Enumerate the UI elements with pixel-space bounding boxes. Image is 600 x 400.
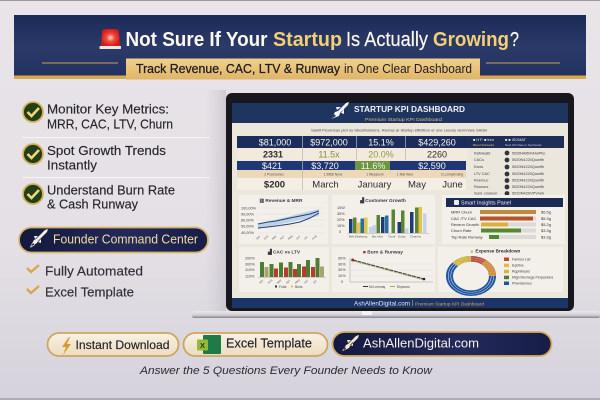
- chart: burn and runway: 90%: [338, 256, 346, 260]
- chart: CAC vs LTV: Apr: [285, 279, 291, 285]
- panel: smart insights: $3.3g: [541, 234, 551, 239]
- side list panel: 5020N4220Quwtfh: [512, 158, 544, 162]
- chart: burn and runway: Mi Lrmmay: [369, 285, 386, 289]
- side list panel: 5020N4220Quwtfh: [512, 172, 544, 176]
- benefit: burn rate: & Cash Runway: [47, 196, 138, 212]
- KPI table: January: [358, 180, 392, 190]
- chart: CAC vs LTV: May: [294, 278, 301, 285]
- chart: revenue and MRR: [239, 195, 328, 244]
- chart: customer growth: Tiontr: [388, 234, 396, 238]
- chart: expense breakdown: [438, 247, 563, 295]
- dashboard header: STARTUP KPI DASHBOARD: [354, 105, 465, 114]
- chart: customer growth: Chanlns: [410, 234, 422, 238]
- laptop with dashboard: [226, 93, 574, 311]
- side list panel: 5020N4220Quwtfh: [512, 165, 544, 169]
- side list panel: [467, 136, 564, 196]
- chart: CAC vs LTV: Jul: [312, 279, 318, 285]
- KPI table: 11.5x: [318, 150, 340, 160]
- title: [126, 29, 519, 51]
- KPI table: $200: [264, 180, 285, 190]
- chart: CAC vs LTV: Jan: [258, 278, 264, 285]
- dashboard footer: Premium Startup KPI Dashboard: [415, 302, 485, 306]
- KPI table: 1 Wepsoom: [366, 172, 384, 176]
- chart: CAC vs LTV: Jun: [303, 278, 309, 285]
- dashboard header: Premium Startup KPI Dashboard: [365, 117, 443, 122]
- KPI table: June: [442, 180, 463, 190]
- chart: customer growth: 35%: [337, 212, 345, 216]
- chart: customer growth: ▟ Customer Growth: [359, 197, 406, 204]
- laptop base: [192, 311, 600, 318]
- KPI table: 1 Mat Nare: [397, 172, 413, 176]
- button: instant download: [48, 333, 178, 356]
- title: ?: [510, 29, 519, 51]
- chart: expense breakdown: ▲ Expense Breakdown: [470, 248, 521, 254]
- title: Growing: [433, 29, 509, 51]
- KPI table: 1 5568 Nyns: [324, 172, 343, 176]
- panel: smart insights: MRR Churn: [451, 210, 472, 214]
- chart: revenue and MRR: Mar: [271, 234, 277, 241]
- dashboard caption: Sanlit Pexaricas plot us Sbestholsions. Remas ar Startup effetition or one Leeary dermmws SADB: [311, 128, 487, 132]
- KPI table: 2 Lcomprixding: [441, 172, 463, 176]
- panel: smart insights: Smart Insights Panel: [461, 200, 511, 206]
- chart: revenue and MRR: May: [287, 234, 294, 241]
- side list panel: Rnernuc: [474, 178, 488, 182]
- side list panel: LTV CAC: [474, 172, 490, 176]
- chart: customer growth: Bei Intrs: [372, 234, 384, 238]
- benefit: growth trends: Instantly: [47, 158, 98, 172]
- panel: smart insights: Churn Rate: [451, 228, 472, 233]
- chart: customer growth: Dusty: [398, 234, 406, 238]
- KPI table: $429,260: [418, 138, 456, 148]
- chart: revenue and MRR: 40,00%: [241, 231, 255, 235]
- chart: customer growth: 0: [339, 230, 341, 234]
- chart: CAC vs LTV: ▟ CAC vs LTV: [267, 248, 301, 256]
- button: excel template: [184, 333, 328, 356]
- panel: smart insights: $5.5g: [541, 210, 551, 214]
- chart: revenue and MRR: Apr: [279, 235, 285, 241]
- feature list: Fully Automated: [45, 264, 143, 278]
- subtitle ribbon: Track Revenue, CAC, LTV & Runway: [136, 62, 341, 76]
- feature list: Excel Template: [45, 286, 134, 300]
- KPI table: 2 Proresuries: [264, 172, 284, 176]
- KPI table: $972,000: [310, 138, 348, 148]
- chart: CAC vs LTV: [239, 247, 329, 292]
- panel: smart insights: CAC /TV CAC: [451, 216, 476, 221]
- chart: revenue and MRR: 100,00%: [241, 206, 257, 210]
- panel: smart insights: $3.3g: [541, 228, 551, 233]
- KPI table: $2,590: [418, 161, 446, 171]
- side list panel: 5020N420VPVrwh: [512, 192, 544, 196]
- chart: CAC vs LTV: 300%: [245, 262, 255, 266]
- title: Is Actually: [346, 29, 428, 51]
- benefit: growth trends: [23, 143, 166, 172]
- founder command center pill: Founder Command Center: [53, 232, 198, 246]
- side list panel: 5020N4220Quwtfh: [512, 185, 544, 189]
- icon: rocket: [331, 102, 349, 119]
- KPI table: May: [408, 180, 426, 190]
- title: Not Sure If Your: [126, 29, 268, 51]
- side list panel: Rafnieabt: [474, 152, 491, 156]
- chart: CAC vs LTV: Burls: [295, 285, 303, 289]
- button: instant download: Instant Download: [76, 338, 170, 352]
- chart: burn and runway: ■ Burn & Runway: [363, 250, 403, 256]
- chart: CAC vs LTV: Feb: [267, 278, 274, 285]
- KPI table: $81,000: [259, 138, 291, 148]
- chart: revenue and MRR: 50,00%: [241, 224, 255, 228]
- chart: customer growth: 10W: [337, 206, 345, 210]
- icon: red alarm siren: [100, 29, 121, 49]
- icon: excel logo: [197, 335, 221, 354]
- chart: expense breakdown: Mign Revnege Perpanions: [512, 276, 553, 280]
- chart: burn and runway: 30%: [338, 268, 346, 272]
- KPI table: 11.6%: [361, 161, 385, 171]
- chart: customer growth: 20%: [337, 218, 345, 222]
- chart: burn and runway: 0: [341, 280, 343, 284]
- benefit: monitor key metrics: [23, 102, 173, 132]
- benefit: monitor key metrics: Monitor Key Metrics:: [47, 102, 169, 116]
- button: excel template: Excel Template: [226, 336, 312, 350]
- banner: [14, 15, 586, 80]
- panel: smart insights: $5.3g: [541, 216, 551, 221]
- benefit: growth trends: Spot Growth Trends: [47, 143, 166, 158]
- panel: smart insights: Revenn Growth: [451, 222, 479, 227]
- dashboard footer: AshAllenDigital.com: [354, 302, 410, 308]
- side list panel: ■ H F. ■ lnrn: [473, 138, 494, 142]
- side list panel: CACs: [474, 158, 484, 162]
- side list panel: 5020N4220Quwtfh: [512, 178, 544, 182]
- side list panel: 5020N406VVHwPhs: [512, 152, 545, 156]
- benefit list: [22, 102, 210, 212]
- chart: CAC vs LTV: 110%: [245, 274, 255, 278]
- button: website: AshAllenDigital.com: [363, 336, 479, 350]
- chart: revenue and MRR: Feb: [263, 234, 270, 241]
- side list panel: Blood Sobsedrs: [473, 143, 495, 147]
- chart: revenue and MRR: Jan: [255, 234, 261, 241]
- chart: revenue and MRR: ▥ Revenue & MRR: [260, 198, 303, 204]
- chart: burn and runway: Ekpeons: [397, 285, 410, 289]
- icon: excel logo: X: [200, 341, 205, 350]
- side list panel: ■ ■ ISOMAT: [505, 138, 527, 142]
- benefit: monitor key metrics: MRR, CAC, LTV, Churn: [47, 116, 173, 132]
- KPI table: [237, 136, 467, 190]
- side list panel: Sqnt. cnoleon: [474, 192, 497, 196]
- chart: burn and runway: [332, 247, 435, 292]
- dashboard header: [232, 102, 568, 123]
- donut: [447, 257, 495, 295]
- chart: expense breakdown: Pherotennes: [512, 282, 532, 286]
- chart: customer growth: Beit Ellabstng: [349, 234, 368, 238]
- KPI table: $421: [262, 161, 282, 171]
- subtitle ribbon: [126, 58, 480, 80]
- chart: customer growth: 15%: [337, 224, 345, 228]
- chart: CAC vs LTV: 200%: [245, 256, 255, 260]
- dashboard footer: [232, 298, 568, 308]
- chart: CAC vs LTV: Mar: [276, 278, 282, 285]
- panel: smart insights: $5.2g: [541, 222, 551, 227]
- side list panel: Next Oil Ghee in Synctered: [505, 143, 542, 147]
- icon: rocket: [30, 229, 48, 248]
- button: website: [332, 332, 552, 356]
- chart: revenue and MRR: Aug: [311, 234, 318, 241]
- chart: customer growth: [332, 195, 435, 244]
- subtitle ribbon: in One Clear Dashboard: [344, 62, 472, 76]
- chart: revenue and MRR: Jul: [303, 235, 309, 241]
- side list panel: Earrs: [474, 165, 483, 169]
- icon: lightning bolt: [62, 337, 71, 355]
- KPI table: 2331: [263, 150, 283, 160]
- chart: CAC vs LTV: Fotal: [279, 285, 287, 289]
- KPI table: 2260: [427, 150, 447, 160]
- KPI table: March: [312, 180, 339, 190]
- KPI table: 15.1%: [368, 138, 394, 148]
- benefit: burn rate: Understand Burn Rate: [47, 182, 175, 198]
- chart: expense breakdown: Eqntive: [512, 264, 524, 268]
- panel: smart insights: Top Rate Runway: [451, 234, 483, 239]
- chart: CAC vs LTV: 110%: [245, 268, 255, 272]
- chart: burn and runway: 30%: [338, 262, 346, 266]
- icon: rocket: [342, 335, 359, 351]
- tagline: Answer the 5 Questions Every Founder Needs to Know: [139, 365, 433, 377]
- chart: expense breakdown: Rqpnibears: [512, 270, 530, 274]
- chart: expense breakdown: Famroo List: [512, 258, 531, 262]
- chart: revenue and MRR: 90,00%: [241, 212, 255, 216]
- KPI table: 20.0%: [368, 150, 394, 160]
- panel: smart insights: [442, 195, 565, 244]
- chart: revenue and MRR: Jun: [295, 234, 301, 241]
- chart: revenue and MRR: 80,00%: [241, 218, 255, 222]
- feature list: [27, 264, 143, 300]
- title: Startup: [273, 29, 342, 51]
- founder command center pill: [19, 228, 208, 252]
- KPI table: $3,720: [311, 161, 339, 171]
- benefit: burn rate: [23, 182, 175, 212]
- chart: burn and runway: 10%: [338, 274, 346, 278]
- side list panel: Roonurs: [474, 185, 488, 189]
